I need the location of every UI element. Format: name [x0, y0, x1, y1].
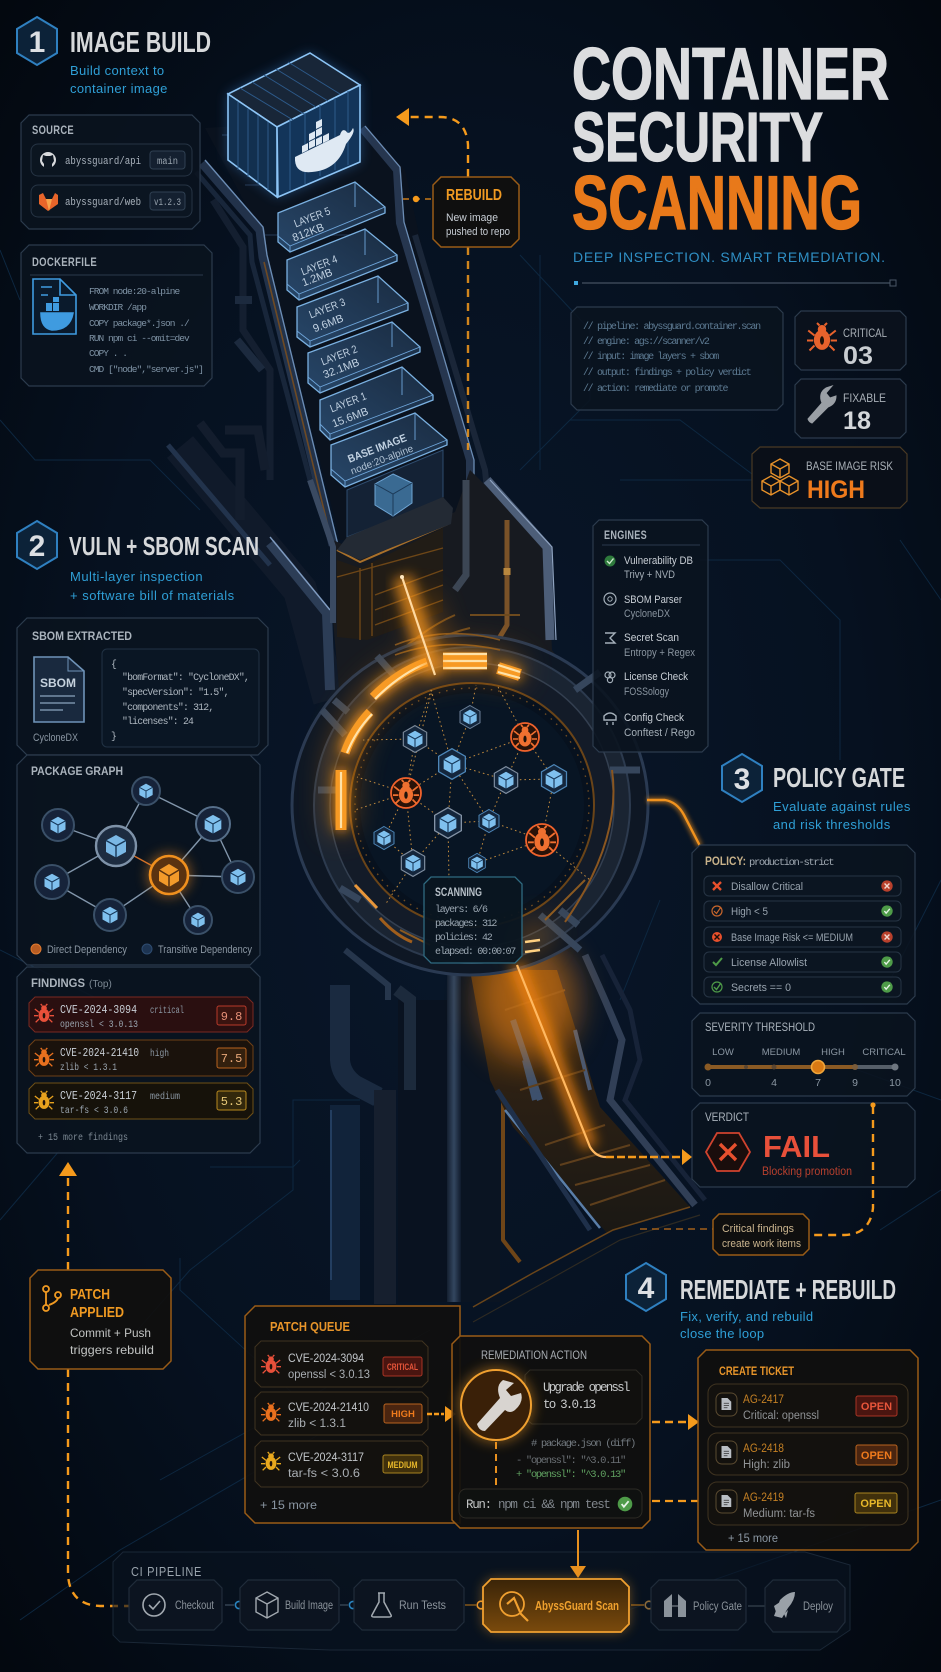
icon: shipping container: [228, 53, 360, 197]
panel: policy: POLICY:: [705, 854, 746, 868]
panel: severity threshold: SEVERITY THRESHOLD: [705, 1020, 815, 1034]
icon: cubes: [762, 459, 798, 495]
panel: dockerfile: DOCKERFILE: [32, 255, 97, 269]
subheading: Build context to: [70, 63, 164, 78]
ticket 2418: AG-2418: [743, 1441, 784, 1455]
ticket 2417: AG-2417: [743, 1392, 784, 1406]
scanning status panel: layers: 6/6: [435, 904, 488, 916]
panel: dockerfile: [21, 245, 212, 386]
layer 1: [320, 367, 433, 440]
ticket 2417: [708, 1384, 908, 1427]
panel: findings: (Top): [89, 979, 112, 990]
step badge 3: [722, 754, 762, 802]
queue: tar-fs: tar-fs < 3.0.6: [288, 1468, 360, 1480]
step: policy gate: [651, 1580, 746, 1630]
step: deploy: Deploy: [803, 1601, 833, 1613]
layer 2: [308, 322, 420, 393]
link: [748, 1605, 766, 1607]
severity labels: HIGH: [821, 1047, 845, 1058]
arrow: queue to action: [427, 1406, 456, 1422]
sbom json: {: [111, 659, 117, 670]
link: [465, 1601, 485, 1609]
scanning status panel: policies: 42: [435, 932, 493, 944]
panel: pipeline comments: // input: image layers + sbom: [583, 351, 719, 363]
subheading: close the loop: [680, 1326, 764, 1341]
ramp to verdict: [470, 940, 705, 1322]
panel: pipeline comments: // engine: ags://scanner/v2: [583, 336, 710, 348]
link: [225, 1601, 243, 1609]
panel: ci pipeline: [113, 1552, 850, 1650]
base image: [331, 413, 447, 516]
step: abyssguard scan: AbyssGuard Scan: [535, 1599, 619, 1613]
ticket 2417: Critical: openssl: [743, 1410, 819, 1422]
rule rows: Secrets == 0: [731, 982, 791, 994]
queue: openssl: openssl < 3.0.13: [288, 1369, 370, 1381]
stat: fixable: 18: [843, 407, 871, 435]
sbom json: }: [111, 731, 116, 742]
finding: high: [29, 1040, 253, 1076]
finding: high: CVE-2024-21410: [60, 1047, 139, 1060]
stat: base image risk: [752, 447, 907, 508]
step badge 4: 4: [638, 1272, 655, 1305]
subheading: Evaluate against rules: [773, 799, 911, 814]
step badge 1: [17, 17, 57, 65]
finding: medium: tar-fs < 3.0.6: [60, 1105, 128, 1117]
layer 5: 812KB: [291, 221, 326, 244]
scanning dependency network: [355, 685, 590, 905]
engine: vulnerability db: Vulnerability DB: [624, 555, 693, 567]
layer 4: 1.2MB: [300, 267, 334, 289]
stair deck and rails: [196, 118, 487, 545]
panel: create ticket: CREATE TICKET: [719, 1364, 795, 1378]
dashed connector: [495, 1442, 497, 1488]
engine: secret scan: Secret Scan: [624, 632, 679, 644]
link: [340, 1601, 357, 1609]
repo row: api: [31, 144, 192, 176]
panel: package graph: [17, 755, 260, 965]
base image: node:20-alpine: [349, 443, 415, 477]
package diff: # package.json (diff): [531, 1438, 635, 1450]
icon: sbom document: [34, 657, 84, 722]
layer 2: LAYER 2: [319, 344, 359, 368]
queue: openssl: CVE-2024-3094: [288, 1353, 365, 1365]
heading: IMAGE BUILD: [70, 27, 211, 59]
sbom json: "specVersion": "1.5",: [122, 687, 229, 698]
severity scale: 4: [771, 1077, 777, 1089]
sbom json: "components": 312,: [122, 702, 213, 713]
severity labels: CRITICAL: [862, 1047, 906, 1058]
severity scale: 0: [705, 1077, 711, 1089]
dockerfile code: WORKDIR /app: [89, 302, 147, 313]
icon: whale: [295, 119, 354, 172]
panel: remediation action: [452, 1336, 650, 1528]
queue: zlib: [255, 1392, 428, 1435]
panel: create ticket: [698, 1350, 918, 1550]
run command: [459, 1489, 642, 1518]
sbom json: "bomFormat": "CycloneDX",: [122, 672, 249, 683]
rebuild connector: [396, 108, 468, 450]
connector to policy gate: [647, 800, 700, 846]
run command: Run:: [466, 1498, 491, 1512]
direct dependency node: [147, 853, 191, 897]
icon: bug: [807, 323, 837, 350]
ticket 2418: [708, 1433, 908, 1475]
panel: engines: ENGINES: [604, 528, 647, 542]
panel: pipeline comments: // output: findings + policy verdict: [583, 367, 751, 379]
step: deploy: [765, 1580, 845, 1632]
stat: fixable: [795, 379, 906, 438]
layer 1: 15.6MB: [331, 406, 370, 430]
rule rows: Disallow Critical: [731, 881, 803, 893]
subheading: and risk thresholds: [773, 817, 891, 832]
panel: patch queue: + 15 more: [260, 1498, 317, 1512]
panel: sbom extracted: CycloneDX: [33, 732, 79, 744]
panel: findings: + 15 more findings: [38, 1132, 128, 1144]
rule rows: License Allowlist: [731, 957, 807, 969]
severity labels: MEDIUM: [762, 1047, 800, 1058]
section 1 header: [17, 17, 211, 96]
arrow: critical findings to work items: [640, 1102, 876, 1235]
icon: git branch: [43, 1286, 61, 1311]
repo row: web: abyssguard/web: [65, 197, 141, 209]
layer 3: LAYER 3: [307, 297, 347, 321]
icon: sbom document: SBOM: [40, 676, 76, 690]
severity slider: [704, 1060, 898, 1074]
stat: base image risk: HIGH: [807, 476, 865, 504]
engine: license check: FOSSology: [624, 686, 669, 698]
panel: patch queue: PATCH QUEUE: [270, 1319, 350, 1334]
dockerfile code: CMD ["node","server.js"]: [89, 364, 203, 375]
finding: critical: openssl < 3.0.13: [60, 1019, 138, 1031]
panel: source: SOURCE: [32, 123, 74, 137]
dockerfile code: FROM node:20-alpine: [89, 286, 181, 297]
stat: critical: CRITICAL: [843, 326, 887, 340]
engine: sbom parser: [604, 593, 682, 620]
callout: critical findings: create work items: [722, 1238, 801, 1250]
callout: patch applied: APPLIED: [70, 1304, 124, 1321]
step: run tests: Run Tests: [399, 1600, 446, 1612]
subheading: + software bill of materials: [70, 588, 235, 603]
ticket 2418: High: zlib: [743, 1459, 790, 1471]
step: checkout: Checkout: [175, 1600, 215, 1612]
panel: findings: [17, 967, 260, 1153]
severity labels: LOW: [712, 1047, 734, 1058]
callout: upgrade: [525, 1370, 642, 1424]
panel: severity threshold: [692, 1013, 915, 1096]
callout: critical findings: Critical findings: [722, 1223, 794, 1235]
queue: tar-fs: [255, 1441, 428, 1487]
callout: patch applied: Commit + Push: [70, 1326, 151, 1340]
ticket 2419: AG-2419: [743, 1490, 784, 1504]
engine: secret scan: [605, 632, 695, 659]
step: policy gate: Policy Gate: [693, 1601, 742, 1613]
layer 3: [297, 276, 408, 347]
arrowhead: [396, 108, 409, 126]
subheading: Fix, verify, and rebuild: [680, 1309, 813, 1324]
finding: critical: critical: [150, 1005, 184, 1017]
hex package nodes: [374, 706, 566, 876]
ticket 2417: OPEN: [861, 1401, 892, 1413]
step: checkout: [129, 1580, 222, 1630]
repo row: api: abyssguard/api: [65, 156, 141, 168]
finding: medium: [29, 1083, 253, 1119]
panel: patch queue: [245, 1306, 460, 1523]
ticket 2419: OPEN: [860, 1498, 892, 1510]
queue: openssl: [255, 1341, 428, 1387]
base image: BASE IMAGE: [346, 432, 408, 466]
network links: [355, 685, 590, 905]
dockerfile code: [89, 286, 203, 375]
layer 1: LAYER 1: [328, 391, 368, 415]
tagline: DEEP INSPECTION. SMART REMEDIATION.: [573, 249, 885, 265]
callout: patch applied: [30, 1270, 171, 1369]
engine: sbom parser: SBOM Parser: [624, 594, 682, 606]
legend: [31, 944, 252, 956]
engine: sbom parser: CycloneDX: [624, 608, 671, 620]
queue: openssl: CRITICAL: [387, 1362, 418, 1372]
step: abyssguard scan: [483, 1579, 629, 1632]
central machinery: [168, 118, 705, 1322]
package diff: + "openssl": "^3.0.13": [516, 1469, 625, 1481]
rule rows: [704, 876, 901, 997]
panel: sbom extracted: [17, 618, 268, 755]
section 2 header: [17, 521, 259, 603]
dockerfile code: COPY package*.json ./: [89, 318, 190, 329]
finding: high: high: [150, 1048, 169, 1060]
panel: package graph: PACKAGE GRAPH: [31, 764, 123, 778]
arrow: scan to verdict: [606, 1149, 692, 1165]
layer 4: LAYER 4: [299, 254, 339, 278]
finding: critical: 9.8: [221, 1010, 242, 1024]
panel: sbom extracted: SBOM EXTRACTED: [32, 629, 132, 643]
engine: config check: [604, 712, 695, 739]
panel: verdict: Blocking promotion: [762, 1166, 852, 1178]
step: build image: Build Image: [285, 1600, 333, 1612]
finding: medium: medium: [150, 1091, 180, 1103]
dockerfile code: COPY . .: [89, 348, 127, 359]
step badge 3: 3: [734, 763, 750, 796]
panel: policy: [692, 845, 915, 1004]
step badge 2: 2: [29, 530, 45, 563]
panel: pipeline comments: // action: remediate or promote: [583, 383, 729, 395]
callout: upgrade: Upgrade openssl: [543, 1381, 630, 1395]
graph nodes: [35, 777, 254, 934]
panel: engines: [593, 520, 708, 752]
callout: rebuild: New image: [446, 212, 498, 224]
ticket 2419: [708, 1482, 908, 1525]
panel: findings: FINDINGS: [31, 976, 85, 990]
callout: rebuild: REBUILD: [446, 187, 502, 204]
queue: tar-fs: CVE-2024-3117: [288, 1452, 364, 1464]
rule rows: High < 5: [731, 906, 768, 918]
orange ring glow: [341, 600, 613, 952]
legend: Direct Dependency: [47, 944, 127, 956]
queue: zlib: CVE-2024-21410: [288, 1402, 369, 1414]
repo row: web: v1.2.3: [154, 198, 181, 209]
package diff: - "openssl": "^3.0.11": [516, 1455, 625, 1467]
title: SECURITY: [572, 98, 823, 176]
legend: Transitive Dependency: [158, 944, 252, 956]
finding: critical: CVE-2024-3094: [60, 1004, 137, 1017]
step: run tests: [354, 1580, 464, 1630]
panel: verdict: [692, 1103, 915, 1187]
callout: rebuild: [433, 177, 519, 247]
package diff: [516, 1438, 635, 1481]
panel: create ticket: + 15 more: [728, 1533, 778, 1545]
callout: patch applied: PATCH: [70, 1286, 110, 1303]
engine: config check: Conftest / Rego: [624, 727, 695, 739]
lower left pipes: [168, 200, 520, 1304]
icon: fail hexagon: [706, 1133, 750, 1171]
severity scale: 7: [815, 1077, 821, 1089]
bug nodes: [391, 723, 558, 856]
stat: fixable: FIXABLE: [843, 391, 886, 405]
panel: pipeline comments: // pipeline: abyssguard.container.scan: [583, 321, 761, 333]
ticket 2418: OPEN: [861, 1450, 892, 1462]
arrow: action to ci scan: [570, 1530, 586, 1578]
layer 3: 9.6MB: [311, 313, 345, 335]
finding: high: zlib < 1.3.1: [60, 1062, 117, 1074]
scanner ring: [292, 634, 648, 975]
sbom json: "licenses": 24: [122, 716, 194, 727]
icon: wrench circle: [458, 1367, 534, 1443]
step badge 2: [17, 521, 57, 569]
finding: critical: [29, 997, 253, 1032]
step badge 1: 1: [29, 26, 45, 59]
panel: source: [21, 115, 200, 229]
callout: rebuild: pushed to repo: [446, 226, 510, 238]
step badge 4: [626, 1263, 666, 1311]
panel: ci pipeline: CI PIPELINE: [131, 1564, 202, 1579]
queue: zlib: zlib < 1.3.1: [288, 1418, 346, 1430]
severity scale: 10: [889, 1077, 901, 1089]
finding: medium: 5.3: [221, 1095, 242, 1109]
arrow: patch loop: [59, 1162, 130, 1606]
layer 5: LAYER 5: [292, 206, 332, 230]
layer 2: 32.1MB: [322, 357, 361, 381]
callout: patch applied: triggers rebuild: [70, 1343, 154, 1357]
arrow: action to ticket: [652, 1414, 699, 1501]
stat: critical: [795, 311, 906, 370]
severity labels: [712, 1047, 906, 1058]
dockerfile code: RUN npm ci --omit=dev: [89, 333, 190, 344]
subheading: Multi-layer inspection: [70, 569, 203, 584]
section 4 header: [626, 1263, 896, 1341]
link: [631, 1601, 653, 1609]
scanning status panel: [424, 877, 522, 963]
panel: verdict: VERDICT: [705, 1110, 750, 1124]
repo row: api: main: [157, 156, 178, 168]
engine: config check: Config Check: [624, 712, 684, 724]
graph links: [52, 791, 238, 920]
scanning status panel: elapsed: 00:00:07: [435, 946, 516, 958]
queue: zlib: HIGH: [391, 1409, 415, 1420]
subheading: container image: [70, 81, 168, 96]
engine: secret scan: Entropy + Regex: [624, 647, 695, 659]
icon: dockerfile document: [33, 279, 76, 334]
panel: pipeline comments: [571, 307, 783, 410]
panel: verdict: FAIL: [763, 1129, 830, 1164]
repo row: web: [31, 185, 192, 217]
icon: wrench: [808, 386, 836, 423]
section 3 header: [722, 754, 911, 832]
scanning status panel: SCANNING: [435, 887, 482, 899]
layer 5: [278, 182, 385, 252]
callout: critical findings: [713, 1214, 809, 1255]
step: build image: [240, 1580, 339, 1630]
run command: npm ci && npm test: [498, 1498, 610, 1512]
queue: tar-fs: MEDIUM: [388, 1460, 418, 1470]
title: [572, 34, 889, 246]
title divider: [574, 280, 896, 286]
finding: medium: CVE-2024-3117: [60, 1090, 137, 1103]
stacked layers: [278, 182, 447, 516]
tower above ring: [270, 450, 590, 700]
orange scan beams: [400, 575, 606, 1157]
heading: VULN + SBOM SCAN: [69, 531, 259, 561]
scanning status panel: packages: 312: [435, 918, 497, 930]
finding: high: 7.5: [221, 1052, 242, 1066]
stat: critical: 03: [843, 342, 873, 370]
sbom json: [102, 649, 259, 747]
layer 4: [287, 229, 397, 300]
stat: base image risk: BASE IMAGE RISK: [806, 461, 893, 473]
container image: [228, 53, 447, 516]
callout: upgrade: to 3.0.13: [543, 1398, 596, 1412]
engine: vulnerability db: Trivy + NVD: [624, 569, 675, 581]
engine: license check: License Check: [624, 671, 688, 683]
panel: policy: production-strict: [749, 857, 834, 869]
engine: vulnerability db: [604, 555, 693, 581]
rule rows: Base Image Risk <= MEDIUM: [731, 932, 853, 944]
severity scale: [705, 1077, 901, 1089]
panel: remediation action: REMEDIATION ACTION: [481, 1350, 587, 1362]
engine: license check: [605, 671, 688, 698]
ticket 2419: Medium: tar-fs: [743, 1508, 815, 1520]
severity scale: 9: [852, 1077, 858, 1089]
